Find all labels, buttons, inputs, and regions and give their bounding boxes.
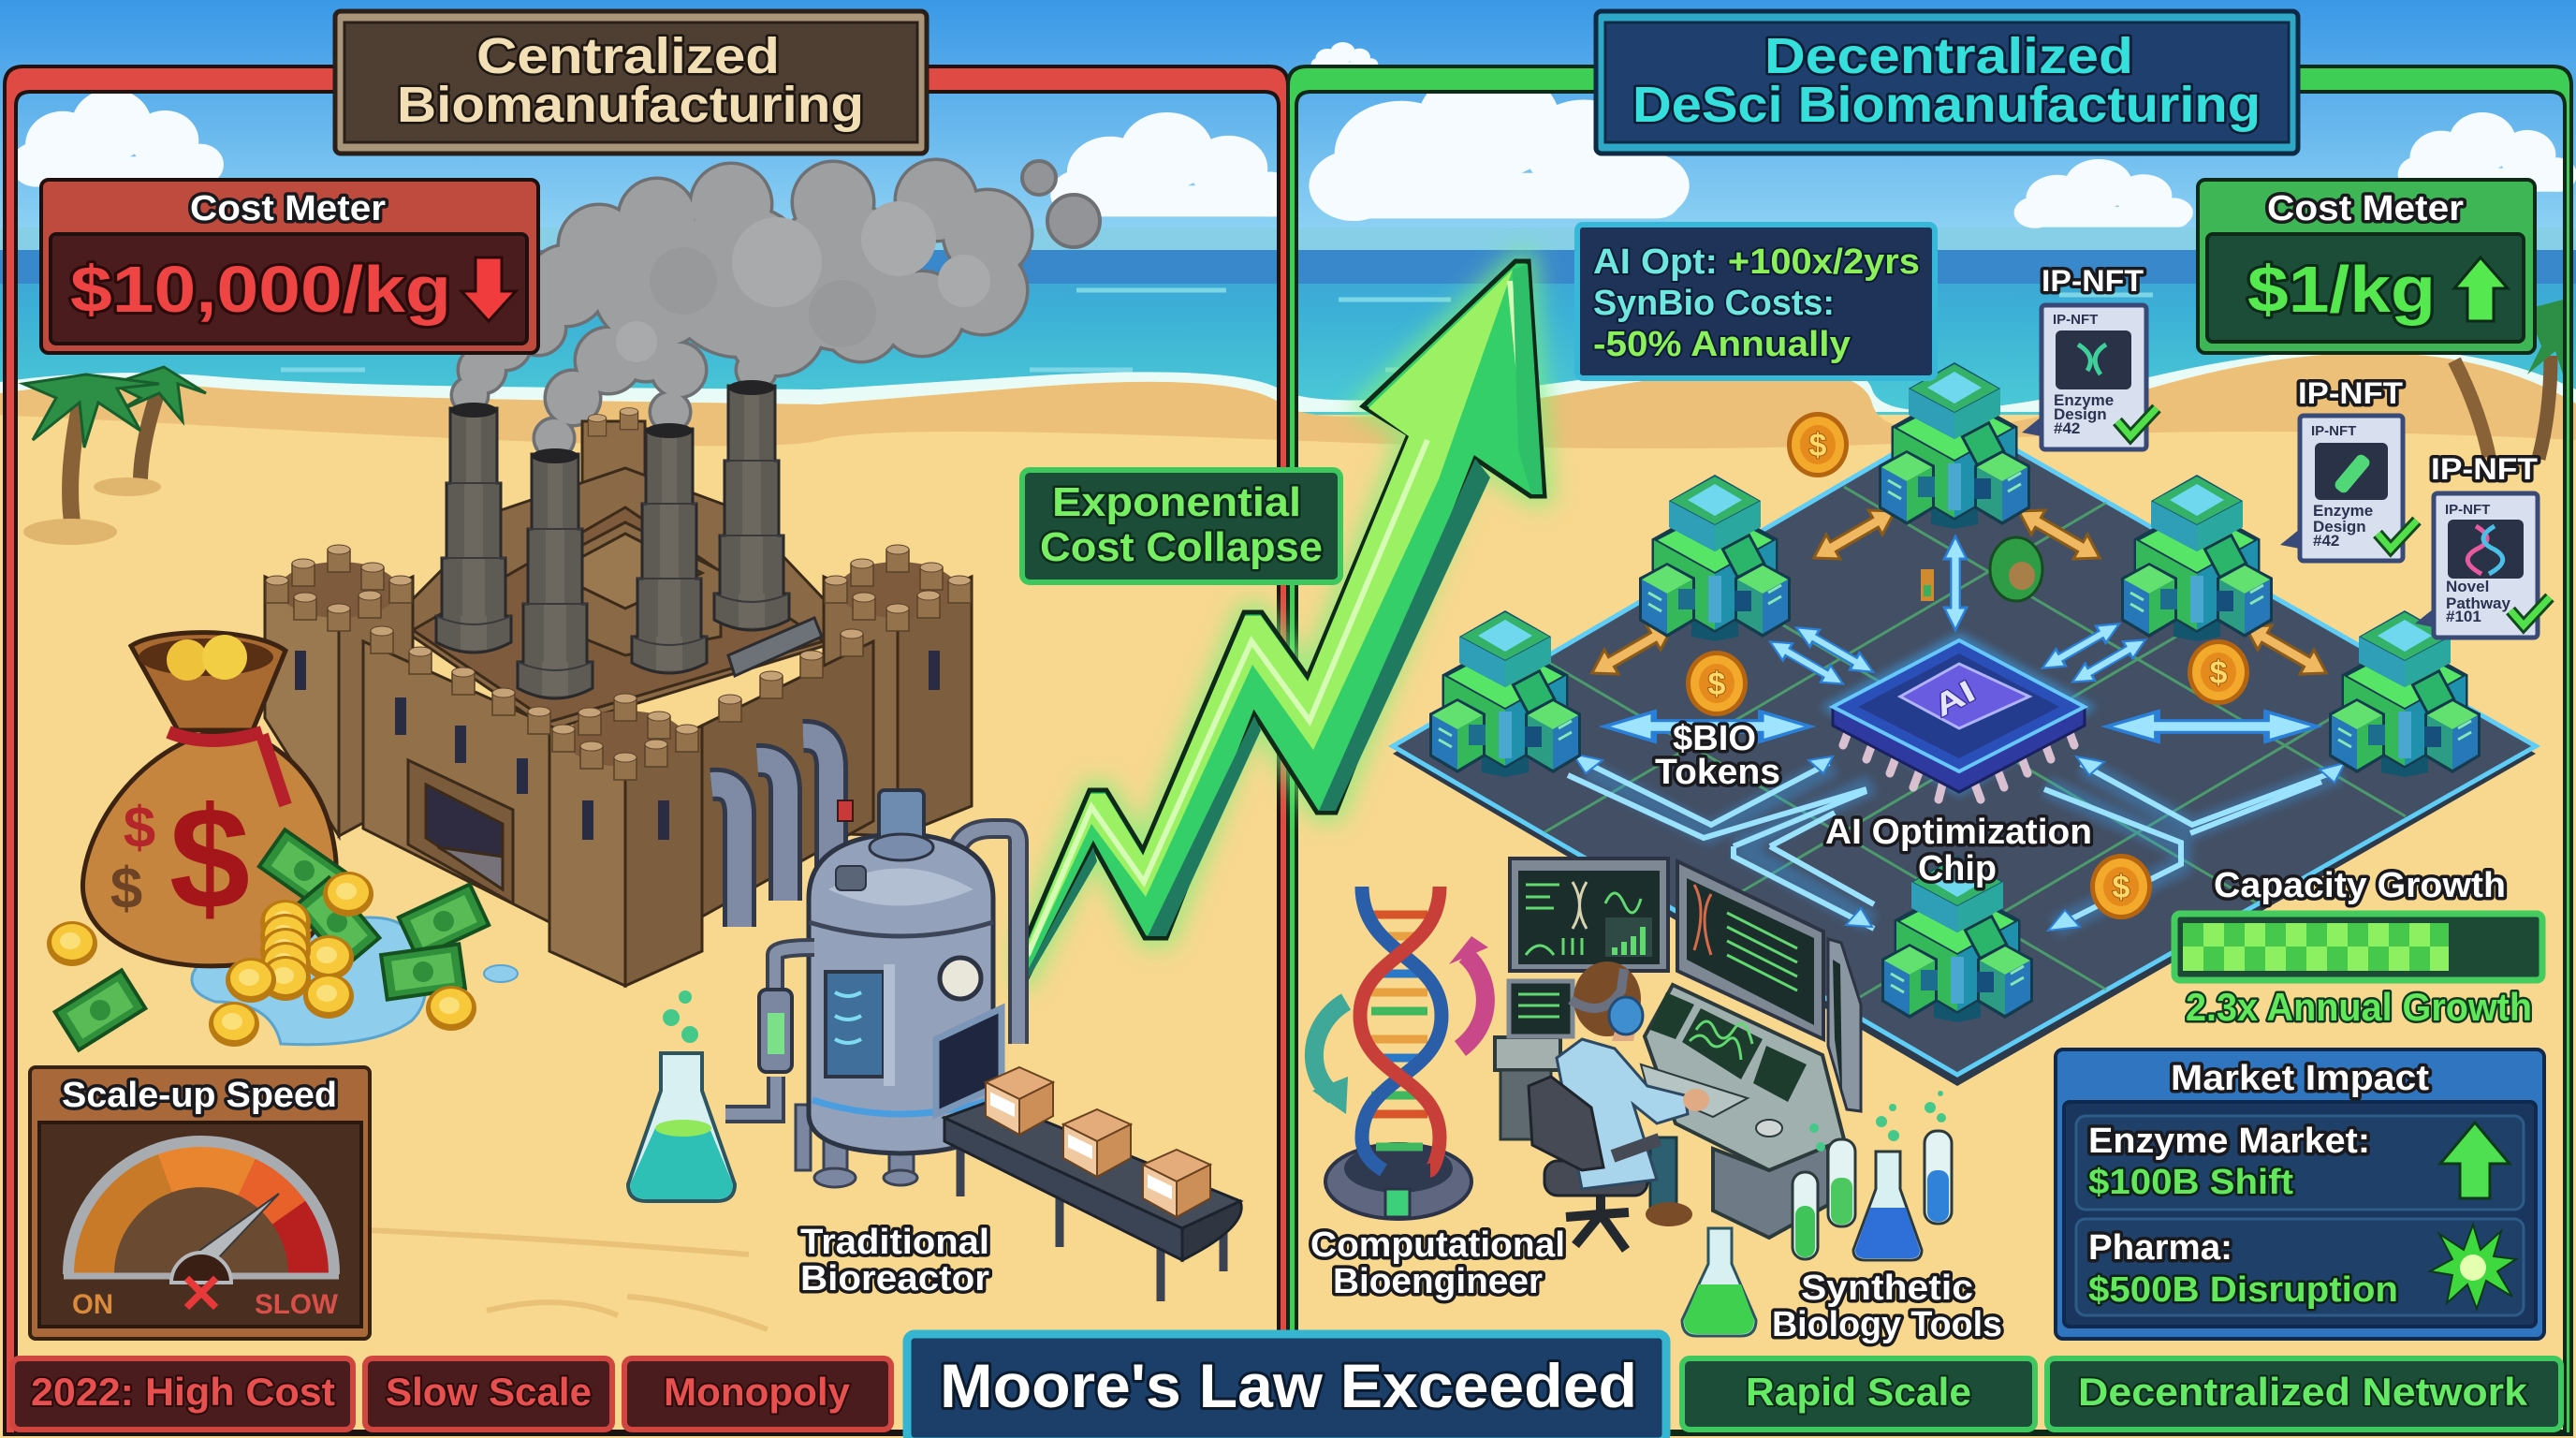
title: Centralized Biomanufacturing: Centralized [476,28,780,84]
IP-NFT card 3: Novel [2446,578,2489,595]
market impact panel: Enzyme Market: [2088,1122,2370,1161]
title: Centralized Biomanufacturing [335,11,927,154]
bioreactor [725,790,1018,1187]
label: Synthetic Biology Tools: Synthetic [1801,1269,1973,1308]
cost meter: centralized [41,180,538,353]
right outlet pipe [955,829,1018,1044]
label: Computational Bioengineer: Computational [1310,1225,1565,1265]
label: $BIO Tokens: Tokens [1655,753,1780,792]
$BIO token coins [1686,412,2249,919]
curved arrows [1314,1002,1346,1095]
AI optimization chip [1821,632,2097,800]
smoke cloud from chimneys [453,161,1100,457]
capacity growth bar [2174,866,2542,1029]
label: Traditional Bioreactor: Bioreactor [800,1259,989,1299]
callout: AI Opt stats: -50% Annually [1593,325,1851,364]
IP-NFT card 3 [2415,452,2550,638]
left tower [265,577,339,836]
pipes behind reactor [711,736,831,927]
banner: Moore's Law Exceeded [907,1334,1666,1438]
label: Computational Bioengineer: Bioengineer [1333,1262,1543,1301]
red tie [168,732,285,805]
IP-NFT card 2: #42 [2313,532,2339,550]
palm trees left [23,367,206,545]
label: AI Optimization Chip: Chip [1918,849,1997,888]
IP-NFT card 1: IP-NFT [2042,264,2144,298]
IP-NFT card 2: Design [2313,518,2366,536]
market impact panel: Market Impact [2171,1059,2429,1098]
icon: green burst [2430,1225,2516,1309]
callout: Exponential Cost Collapse: Exponential [1052,479,1301,525]
front tower [549,726,625,986]
frame: decentralized green border [1288,66,2571,1434]
console screens [1650,992,1694,1039]
conveyor belt with boxes [944,1067,1241,1301]
gauge: scale-up speed: ✕ [179,1264,224,1325]
icon: up arrow [2440,1123,2510,1198]
front left wall [363,641,549,922]
vessel [809,833,993,1153]
money bag with coins and cash: $ [110,857,142,921]
callout: Exponential Cost Collapse [1022,470,1340,582]
tags: centralized: Slow Scale [386,1370,592,1414]
IP-NFT card 3: IP-NFT [2431,452,2539,486]
IP-NFT card 1: Enzyme [2054,391,2114,409]
IP-NFT card 2: IP-NFT [2298,376,2403,410]
cost meter: centralized: $10,000/kg [70,253,451,326]
globe [1990,537,2042,601]
label: AI Optimization Chip [1825,813,2092,888]
label: $BIO Tokens [1655,719,1780,792]
IP-NFT card 1: IP-NFT [2053,312,2098,328]
puddle [192,917,426,1045]
title: Decentralized DeSci Biomanufacturing: Decentralized [1764,28,2133,84]
monitors [1510,858,1668,971]
right tower [824,577,898,836]
icon: green up arrow [2454,257,2508,321]
IP-NFT card 1: #42 [2054,419,2080,437]
market impact panel: $100B Shift [2088,1163,2293,1202]
gate [408,760,513,903]
computational bioengineer workstation [1495,858,1861,1250]
capacity growth bar: 2.3x Annual Growth [2186,985,2532,1029]
IP-NFT card 1: Design [2054,405,2107,423]
cost meter: centralized: Cost Meter [190,189,386,228]
right wall [702,641,873,917]
console body [1713,1142,1828,1238]
IP-NFT card 2: IP-NFT [2311,423,2356,439]
IP-NFT card 3: Pathway [2446,594,2511,612]
label: $BIO Tokens: $BIO [1673,719,1756,758]
gauge needle [197,1194,279,1259]
rear tower [582,421,645,524]
tags: centralized: 2022: High Cost [31,1370,335,1414]
label: AI Optimization Chip: AI Optimization [1825,813,2092,852]
chair base [1566,1196,1629,1250]
cost meter: decentralized [2198,180,2535,353]
glowing data tracks [1587,766,2340,927]
frame: centralized red border [5,66,1288,1434]
synthetic biology tools [1682,1091,1952,1336]
callout: Exponential Cost Collapse: Cost Collapse [1040,524,1323,570]
market impact panel: $500B Disruption [2088,1270,2398,1310]
label: Computational Bioengineer [1310,1225,1565,1301]
callout: AI Opt stats: AI Opt: +100x/2yrs [1593,242,1920,282]
light face [1026,270,1513,964]
tags: centralized [12,1358,891,1430]
gauge: scale-up speed: ON [72,1289,113,1320]
chair back and arm [1529,1077,1603,1170]
side desk [1495,1037,1560,1070]
wall merlons [371,626,393,653]
cost meter: decentralized: Cost Meter [2267,189,2464,228]
tags: decentralized: Rapid Scale [1746,1370,1971,1414]
chimney stacks [436,380,822,698]
side sight tube and flask feed [725,947,814,1114]
lab coat [1557,1039,1688,1189]
banner: Moore's Law Exceeded: Moore's Law Exceeded [940,1351,1637,1420]
icon: red down arrow [461,257,516,321]
decentralized lab nodes [1429,362,2481,1022]
AI optimization chip: AI [1928,674,1981,724]
IP-NFT card 1 [2022,264,2157,449]
title: Centralized Biomanufacturing: Biomanufacturing [397,77,864,133]
callout: AI Opt stats: SynBio Costs: [1593,284,1835,323]
bag body [83,735,336,966]
capacity growth bar: Capacity Growth [2214,866,2506,905]
exponential green arrow [1023,261,1544,986]
iso network platform [1393,417,2536,1086]
door [936,1008,1002,1114]
courtyard floor [413,507,824,722]
cost meter: decentralized: $1/kg [2247,253,2436,326]
market impact panel [2056,1049,2544,1339]
label: Traditional Bioreactor [800,1223,989,1299]
darker side [1319,459,1490,811]
scientist legs [1650,1137,1676,1211]
head and headset [1573,961,1641,1036]
money bag with coins and cash: $ [124,796,155,860]
lab flask [628,990,735,1201]
IP-NFT card 3: IP-NFT [2445,502,2490,518]
tags: centralized: Monopoly [664,1370,851,1414]
windows [295,651,940,840]
keyboard [1641,1064,1748,1117]
label: Synthetic Biology Tools: Biology Tools [1772,1305,2002,1344]
tags: decentralized: Decentralized Network [2078,1370,2528,1414]
IP-NFT card 3: #101 [2446,608,2481,625]
label: Synthetic Biology Tools [1772,1269,2002,1344]
DNA helix on pedestal [1312,887,1488,1219]
label: Traditional Bioreactor: Traditional [800,1223,989,1262]
clouds [11,42,2576,228]
tags: decentralized [1682,1358,2561,1430]
IP-NFT card 2 [2280,376,2417,561]
reactor legs [796,1104,917,1187]
palm tree right [2454,300,2563,471]
money bag with coins and cash: $ [169,777,250,939]
gauge: scale-up speed: SLOW [255,1289,339,1320]
title: Decentralized DeSci Biomanufacturing: DeSci Biomanufacturing [1632,77,2261,133]
sandcastle factory [265,408,972,986]
market impact panel: Pharma: [2088,1228,2232,1268]
title: Decentralized DeSci Biomanufacturing [1596,11,2298,154]
money bag with coins and cash [47,633,518,1050]
gauge: scale-up speed: Scale-up Speed [62,1076,337,1115]
callout: AI Opt stats [1577,225,1935,378]
gauge: scale-up speed [30,1067,370,1339]
IP-NFT card 2: Enzyme [2313,502,2373,520]
back walls [413,468,824,730]
